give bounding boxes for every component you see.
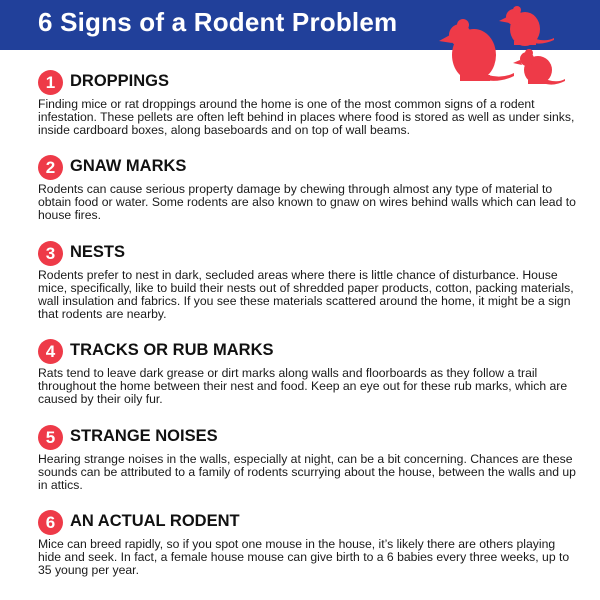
text 5: sounds can be attributed to a family of rodents scurrying about the house, between the walls and up xyxy=(38,465,576,479)
text 3: wall insulation and fabrics. If you see these materials scattered around the home, it might be a sign xyxy=(38,294,570,308)
text 2: house fires. xyxy=(38,208,101,222)
text 3: mice, specifically, like to build their nests out of shredded paper products, cotton, packing materials, xyxy=(38,281,574,295)
number 4 xyxy=(38,339,63,364)
number 5: 5 xyxy=(46,428,55,447)
number 6 xyxy=(38,510,63,535)
section 6: actual rodent xyxy=(38,510,569,577)
section 5: noises xyxy=(38,425,576,492)
text 4: throughout the home between their nest and food. Keep an eye out for these rub marks, which are xyxy=(38,379,567,393)
section 1: droppings xyxy=(38,70,574,137)
text 4 xyxy=(38,366,567,406)
text 1: inside cardboard boxes, along baseboards and on top of wall beams. xyxy=(38,123,410,137)
number 6: 6 xyxy=(46,513,55,532)
text 5 xyxy=(38,452,576,492)
heading 1: DROPPINGS xyxy=(70,72,169,90)
icon: rodents xyxy=(439,6,565,85)
number 2 xyxy=(38,155,63,180)
heading 3: NESTS xyxy=(70,243,125,261)
text 3 xyxy=(38,268,574,321)
text 6: Mice can breed rapidly, so if you spot one mouse in the house, it’s likely there are others playing xyxy=(38,537,555,551)
text 1: infestation. These pellets are often left behind in places where food is stored as well as under sinks, xyxy=(38,110,574,124)
heading 4: TRACKS OR RUB MARKS xyxy=(70,341,274,359)
title: 6 Signs of a Rodent Problem xyxy=(38,7,397,37)
section 2: gnaw marks xyxy=(38,155,576,222)
text 2: obtain food or water. Some rodents are also known to gnaw on wires behind walls which can lead to xyxy=(38,195,576,209)
number 2: 2 xyxy=(46,158,55,177)
text 2: Rodents can cause serious property damage by chewing through almost any type of material to xyxy=(38,182,552,196)
text 6: hide and seek. In fact, a female house mouse can give birth to a 6 babies every three weeks, up to xyxy=(38,550,569,564)
number 1 xyxy=(38,70,63,95)
text 5: in attics. xyxy=(38,478,83,492)
text 1: Finding mice or rat droppings around the home is one of the most common signs of a rodent xyxy=(38,97,535,111)
text 4: Rats tend to leave dark grease or dirt marks along walls and floorboards as they follow a trail xyxy=(38,366,537,380)
text 1 xyxy=(38,97,574,137)
heading 5: STRANGE NOISES xyxy=(70,427,218,445)
text 5: Hearing strange noises in the walls, especially at night, can be a bit concerning. Chances are these xyxy=(38,452,573,466)
header bar xyxy=(0,0,600,50)
section 3: nests xyxy=(38,241,574,321)
section 4: tracks xyxy=(38,339,567,406)
number 3: 3 xyxy=(46,244,55,263)
heading 2: GNAW MARKS xyxy=(70,157,186,175)
text 2 xyxy=(38,182,576,222)
number 4: 4 xyxy=(46,342,55,361)
text 3: Rodents prefer to nest in dark, secluded areas where there is little chance of disturbance. House xyxy=(38,268,558,282)
text 3: that rodents are nearby. xyxy=(38,307,166,321)
number 1: 1 xyxy=(46,73,55,92)
text 6: 35 young per year. xyxy=(38,563,139,577)
text 6 xyxy=(38,537,569,577)
number 5 xyxy=(38,425,63,450)
text 4: caused by their oily fur. xyxy=(38,392,163,406)
heading 6: AN ACTUAL RODENT xyxy=(70,512,240,530)
number 3 xyxy=(38,241,63,266)
